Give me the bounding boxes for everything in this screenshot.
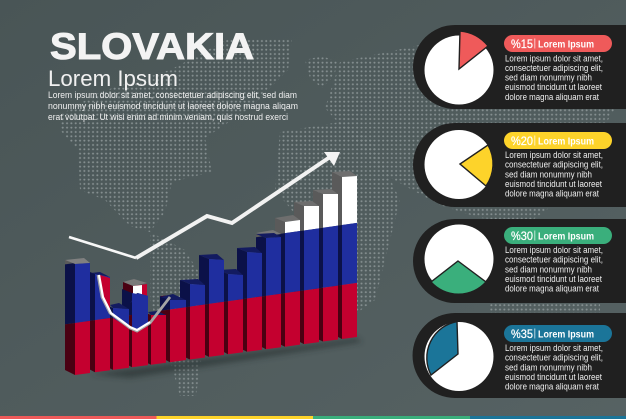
description 20	[505, 150, 603, 198]
description 15: euismod tincidunt ut laoreet	[505, 82, 602, 92]
pie chart 15	[424, 31, 494, 104]
description 20: euismod tincidunt ut laoreet	[505, 179, 602, 189]
label pill 20: %20	[511, 134, 533, 148]
label pill 30: %30	[511, 229, 533, 243]
description 15: sed diam nonummy nibh	[505, 73, 592, 83]
bar 15	[332, 171, 357, 339]
description 35: Lorem ipsum dolor sit amet,	[505, 343, 603, 353]
description 30: euismod tincidunt ut laoreet	[505, 274, 602, 284]
description 20: sed diam nonummy nibh	[505, 169, 592, 179]
bar 12	[275, 215, 300, 347]
bar chart: flag-coloured 3D bars	[65, 171, 357, 375]
label pill 30: Lorem Ipsum	[538, 231, 594, 242]
blue dip across bars 3 and 4	[113, 293, 148, 331]
description 30: consectetuer adipiscing elit,	[505, 255, 603, 265]
intro paragraph: erat volutpat. Ut wisi enim ad minim veniam, quis nostrud exerci	[48, 112, 288, 122]
description 20: dolore magna aliquam erat	[505, 188, 599, 198]
pie chart 35	[424, 322, 494, 391]
label pill 15: Lorem Ipsum	[538, 39, 594, 50]
label pill 35: Lorem Ipsum	[538, 329, 594, 340]
label pill 20	[504, 132, 612, 149]
bar 14	[313, 189, 338, 342]
title: SLOVAKIA	[50, 26, 254, 67]
dotted world map	[60, 38, 626, 396]
description 35: consectetuer adipiscing elit,	[505, 353, 603, 363]
pie chart 30	[424, 224, 494, 294]
description 30: sed diam nonummy nibh	[505, 264, 592, 274]
description 15: consectetuer adipiscing elit,	[505, 63, 603, 73]
label pill 35: %35	[511, 327, 533, 341]
bar 2	[86, 272, 110, 372]
label pill 15	[504, 35, 612, 52]
description 30: Lorem ipsum dolor sit amet,	[505, 245, 603, 255]
description 35: dolore magna aliquam erat	[505, 382, 599, 392]
bar 3	[104, 303, 129, 370]
description 30	[505, 245, 603, 294]
description 20: consectetuer adipiscing elit,	[505, 160, 603, 170]
bar 8	[199, 254, 224, 357]
bar 1	[65, 258, 90, 375]
bottom colour strip	[0, 416, 626, 419]
label pill 20: Lorem Ipsum	[538, 136, 594, 147]
bar shadow	[90, 338, 362, 378]
description 35	[505, 343, 603, 392]
bar 4	[122, 289, 148, 368]
pie chart 20	[424, 130, 494, 199]
bar 10	[237, 247, 262, 352]
description 15: dolore magna aliquam erat	[505, 92, 599, 102]
description 15: Lorem ipsum dolor sit amet,	[505, 53, 603, 63]
bar 11	[256, 230, 281, 350]
red patch on bar 2	[100, 275, 110, 313]
rear bar with white segment	[123, 279, 147, 315]
panel: 20 percent	[413, 123, 626, 207]
label pill 15: %15	[511, 37, 533, 51]
intro paragraph	[48, 90, 298, 122]
intro paragraph: Lorem ipsum dolor sit amet, consectetuer adipiscing elit, sed diam	[48, 90, 297, 100]
label pill 30	[504, 227, 612, 244]
panel: 30 percent	[413, 219, 626, 303]
bar 5	[148, 311, 166, 365]
arrow: rising trend line	[69, 152, 340, 258]
bar 9	[218, 269, 243, 354]
trend line passing through bars	[98, 275, 170, 331]
panel: 15 percent	[413, 25, 626, 109]
description 15	[505, 53, 603, 102]
label pill 35	[504, 325, 612, 342]
bar 6	[160, 294, 186, 362]
description 20: Lorem ipsum dolor sit amet,	[505, 150, 603, 160]
description 35: sed diam nonummy nibh	[505, 362, 592, 372]
description 35: euismod tincidunt ut laoreet	[505, 372, 602, 382]
subtitle: Lorem Ipsum	[48, 66, 178, 91]
bar 7	[180, 279, 205, 360]
description 30: dolore magna aliquam erat	[505, 284, 599, 294]
bar 13	[294, 201, 319, 344]
intro paragraph: nonummy nibh euismod tincidunt ut laoreet dolore magna aliqam	[48, 101, 298, 111]
panel: 35 percent	[413, 313, 626, 398]
